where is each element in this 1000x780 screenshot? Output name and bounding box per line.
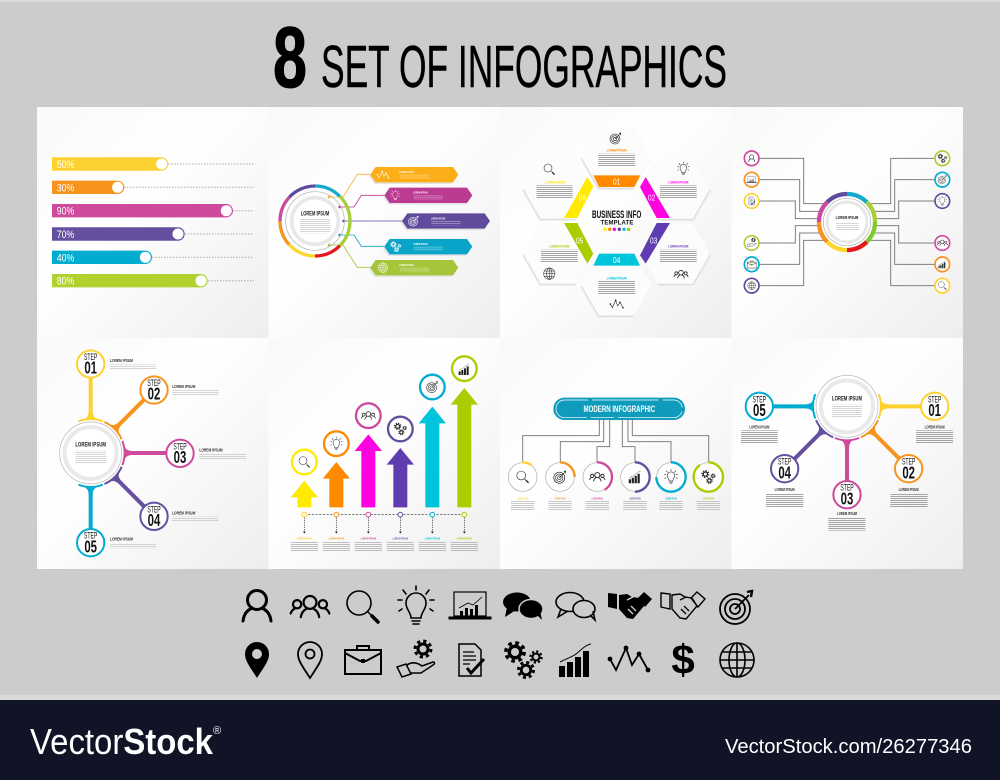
icon: pin solid (245, 642, 269, 678)
icon: hand with gear (397, 641, 434, 677)
hex content right upper (660, 162, 697, 199)
step captions: LOREM IPSUM (925, 425, 945, 430)
strip numbers: 04 (613, 255, 620, 265)
step captions: LOREM IPSUM (899, 487, 919, 492)
panel: ring with arrow tags (266, 167, 490, 277)
registered mark: ® (213, 725, 221, 737)
step captions: LOREM IPSUM (172, 384, 195, 390)
center title (592, 209, 641, 231)
node: target (545, 462, 575, 492)
step 05: STEP (84, 531, 97, 541)
panel backdrop grid (37, 107, 963, 569)
step 04 (140, 503, 168, 530)
panel: circuit hub (744, 151, 950, 293)
icon: handshake outline (661, 592, 705, 619)
circuit lines (759, 158, 935, 286)
bar 30%: 30% (57, 182, 74, 194)
arrow captions: LOREM IPSUM (425, 536, 440, 540)
icon: search (347, 591, 378, 622)
hub ring (807, 182, 887, 262)
node captions: LOREM IPSUM (629, 497, 641, 501)
hex content top (598, 133, 635, 167)
icon: chat solid (503, 592, 543, 620)
bar 50%: 50% (57, 159, 74, 171)
hub: LOREM IPSUM (832, 395, 862, 402)
icon: handshake solid (608, 592, 652, 619)
step 04 (771, 455, 798, 482)
step 03: 03 (174, 447, 187, 467)
icon: pin outline (298, 642, 322, 678)
arrow lime (451, 356, 478, 507)
central ring (266, 172, 364, 270)
tag green: LOREM IPSUM (399, 263, 414, 267)
icon: document check (459, 644, 484, 676)
footer band (0, 695, 1000, 780)
right node: bulb (935, 194, 950, 208)
arrow yellow (291, 450, 318, 507)
step 02 (895, 455, 922, 482)
strip numbers: 06 (579, 193, 586, 203)
step 01: STEP (928, 394, 941, 404)
step 02: STEP (147, 378, 161, 388)
node captions (511, 497, 720, 510)
step captions: LOREM IPSUM (749, 425, 770, 430)
right node: search (935, 278, 950, 293)
step 03: STEP (840, 483, 854, 493)
panel: radial steps (741, 375, 953, 531)
connectors (768, 394, 926, 486)
step 01: STEP (84, 352, 97, 362)
hex content left upper (537, 164, 573, 199)
title: SET OF INFOGRAPHICS (321, 34, 727, 100)
hexagons (523, 128, 710, 315)
bar 80% (52, 274, 208, 288)
step 04: STEP (778, 457, 791, 467)
step 05 (77, 529, 104, 556)
node: bulb (656, 462, 686, 492)
step 02: 02 (148, 384, 160, 404)
node: team (583, 462, 612, 492)
arrow captions: LOREM IPSUM (457, 536, 472, 540)
step captions: LOREM IPSUM (199, 447, 223, 453)
tag orange: LOREM IPSUM (399, 170, 414, 174)
step 04: 04 (148, 510, 161, 530)
bar 70% (52, 227, 185, 241)
hub (60, 422, 122, 484)
panel: vertical steps (60, 350, 246, 556)
right node: chart (935, 257, 950, 272)
bar 40%: 40% (57, 252, 74, 264)
arrow purple (387, 417, 414, 507)
step captions: LOREM IPSUM (172, 510, 195, 516)
step 05: STEP (753, 394, 766, 404)
step 01: 01 (84, 358, 97, 378)
step 05: 05 (753, 400, 766, 420)
icon: zigzag (608, 646, 650, 672)
panel: rising arrows (291, 356, 478, 551)
bar 50% (52, 157, 168, 171)
center title: TEMPLATE (601, 220, 633, 226)
step 04: 04 (778, 462, 791, 482)
step captions (110, 358, 246, 548)
strip numbers: 03 (650, 236, 657, 246)
icon: dollar: $ (671, 636, 695, 683)
hub label: LOREM IPSUM (836, 215, 858, 221)
tag orange (369, 167, 458, 184)
tag green (369, 260, 458, 277)
tag purple: LOREM IPSUM (431, 216, 446, 220)
bar 90%: 90% (57, 206, 74, 218)
step 03 (833, 481, 861, 508)
tag magenta (383, 188, 472, 205)
step 04: STEP (147, 504, 161, 514)
node captions: LOREM IPSUM (665, 497, 677, 501)
node captions: LOREM IPSUM (517, 497, 529, 501)
strip numbers: 02 (648, 193, 655, 203)
icon: bulb (398, 586, 434, 624)
arrow captions: LOREM IPSUM (329, 536, 344, 540)
footer logo: VectorStock (30, 721, 214, 762)
step captions: LOREM IPSUM (775, 487, 795, 492)
icon: laptop chart (449, 592, 491, 619)
tag purple (401, 213, 490, 230)
node: chart (620, 462, 650, 492)
timeline (302, 512, 467, 534)
connectors (78, 374, 170, 532)
icon: globe (720, 643, 754, 677)
hex content left lower: LOREM IPSUM (549, 244, 570, 249)
left node: document (744, 194, 759, 208)
node captions: LOREM IPSUM (592, 497, 603, 501)
strip numbers: 05 (576, 236, 583, 246)
strip numbers: 01 (613, 176, 620, 186)
icon: bar chart (559, 644, 591, 677)
step 02: STEP (902, 457, 915, 467)
step 05 (746, 393, 773, 420)
strip numbers (576, 176, 657, 265)
step captions: LOREM IPSUM (837, 511, 857, 516)
hex content left lower (541, 244, 578, 279)
step 01: 01 (928, 400, 941, 420)
icon: gears (506, 643, 542, 678)
hex content top: LOREM IPSUM (607, 148, 627, 153)
center title: BUSINESS INFO (592, 209, 641, 221)
left node: laptop (744, 172, 759, 187)
hexagon shadows (522, 130, 711, 317)
left node: hand (744, 236, 759, 250)
right node: team (935, 236, 950, 250)
icon: briefcase (345, 646, 381, 674)
hex content right upper: LOREM IPSUM (668, 180, 689, 185)
tree lines (523, 420, 709, 463)
arrow orange (323, 431, 350, 507)
panel: percentage bars (52, 157, 254, 288)
node: gears (694, 462, 723, 492)
step 01 (921, 393, 948, 420)
step captions (741, 425, 953, 531)
hex content left upper: LOREM IPSUM (545, 180, 565, 185)
icon: target (720, 591, 752, 624)
hub (816, 375, 878, 437)
header pill (553, 398, 685, 420)
bar 70%: 70% (57, 229, 74, 241)
header pill: MODERN INFOGRAPHIC (583, 404, 656, 414)
bar 90% (52, 204, 233, 218)
tag teal: LOREM IPSUM (413, 242, 428, 246)
right node: target (935, 172, 950, 187)
step 03: STEP (173, 441, 187, 451)
step 02 (140, 376, 168, 404)
left node: globe (744, 278, 759, 293)
step 02: 02 (902, 462, 915, 482)
arrow captions: LOREM IPSUM (393, 536, 408, 540)
footer id: VectorStock.com/26277346 (725, 736, 972, 758)
left node: briefcase (744, 257, 759, 272)
hex content right lower: LOREM IPSUM (668, 244, 689, 249)
ring label: LOREM IPSUM (301, 210, 329, 217)
left node: user (744, 151, 759, 166)
node captions: LOREM IPSUM (703, 497, 714, 501)
arrow captions: LOREM IPSUM (297, 536, 312, 540)
step 01 (77, 350, 104, 378)
icon row 1 (243, 586, 752, 624)
step 05: 05 (84, 536, 97, 556)
hex content bottom: LOREM IPSUM (607, 275, 627, 280)
arrow captions (291, 536, 478, 551)
right node: gears (935, 151, 950, 166)
hub: LOREM IPSUM (75, 442, 106, 449)
hex content bottom (598, 275, 635, 308)
icon: chat outline (556, 592, 595, 620)
node: search (507, 462, 538, 492)
step captions: LOREM IPSUM (110, 537, 133, 543)
tag teal (383, 239, 472, 256)
panel: modern infographic tree (507, 398, 723, 510)
connectors (328, 174, 402, 267)
node captions: LOREM IPSUM (554, 497, 566, 501)
bar 40% (52, 251, 152, 264)
title (273, 10, 727, 106)
bar 30% (52, 181, 124, 194)
arrow magenta (355, 403, 382, 507)
step captions: LOREM IPSUM (110, 358, 133, 364)
panel: business info hexagons (522, 128, 711, 317)
colored strips (564, 175, 670, 266)
arrow captions: LOREM IPSUM (361, 536, 376, 540)
hex content right lower (660, 244, 697, 278)
tag magenta: LOREM IPSUM (413, 191, 428, 195)
icon: user (243, 590, 271, 621)
step 03 (166, 440, 194, 467)
icon: team (291, 596, 329, 617)
icon row 2 (245, 636, 754, 683)
bar 80%: 80% (57, 276, 74, 288)
step 03: 03 (841, 488, 854, 508)
arrow cyan (419, 375, 446, 507)
title: 8 (273, 10, 307, 106)
